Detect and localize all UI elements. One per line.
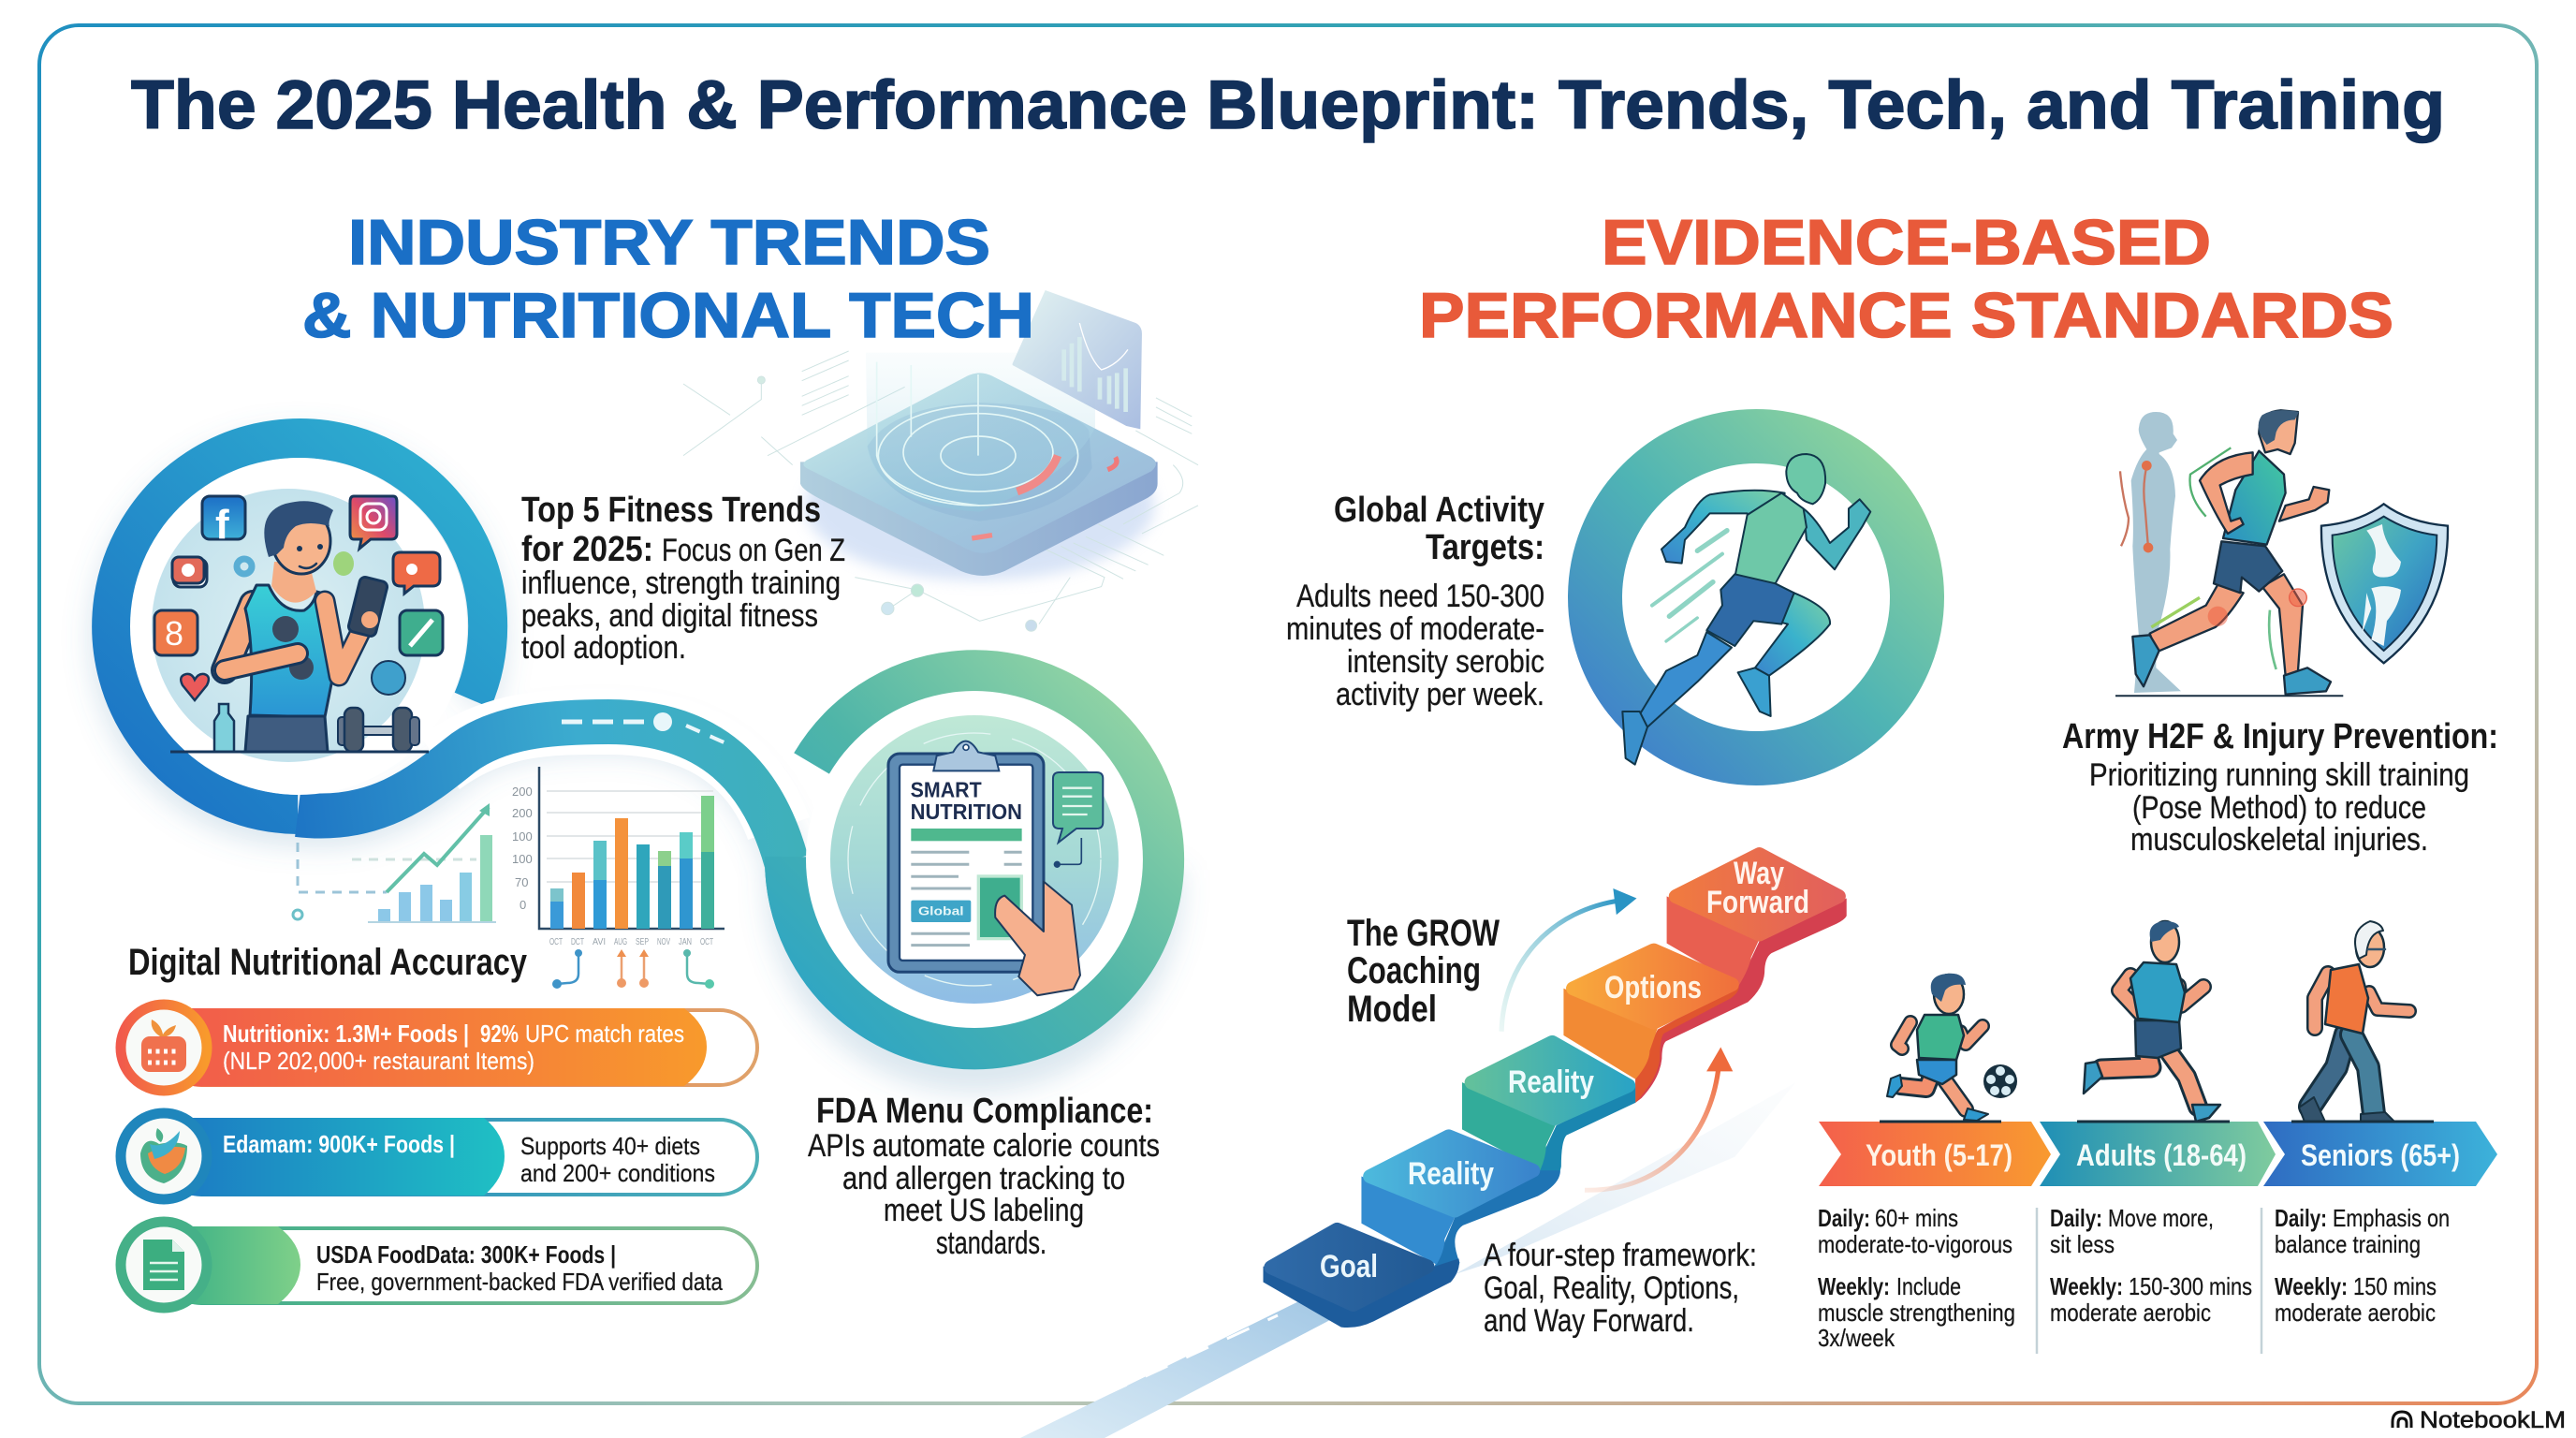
chart: multi colour bar chart: 200 — [512, 806, 533, 820]
step: goal — [1263, 1229, 1459, 1328]
step: reality lower — [1361, 1137, 1560, 1290]
hand — [995, 882, 1080, 995]
heading: industry trends — [302, 207, 1034, 351]
text: the grow coaching model: Coaching — [1347, 950, 1481, 991]
neck and head — [271, 562, 316, 603]
figure: senior walker — [2299, 921, 2409, 1122]
chat bubble — [1053, 772, 1103, 868]
heading: evidence-based performance standards: EVIDENCE-BASED — [1602, 207, 2211, 278]
chevron: youth — [1819, 1122, 2051, 1186]
winding road — [298, 722, 786, 861]
text: youth guidelines: Daily: — [1818, 1204, 1870, 1232]
text: youth guidelines: Include — [1896, 1272, 1961, 1300]
pill: edamam: Edamam: 900K+ Foods | — [223, 1130, 455, 1158]
text: senior guidelines — [2275, 1204, 2450, 1327]
step: way forward — [1635, 855, 1847, 1103]
heading: evidence-based performance standards — [1419, 207, 2393, 351]
text: the grow coaching model: Model — [1347, 989, 1437, 1030]
text: four-step framework: Goal, Reality, Options, — [1484, 1270, 1739, 1306]
labels on steps: Reality — [1508, 1064, 1594, 1100]
text: adult guidelines: Move more, — [2108, 1204, 2214, 1232]
text: youth guidelines: 3x/week — [1818, 1324, 1895, 1352]
arrow: blue curve — [1501, 888, 1636, 1032]
illustration: smart nutrition clipboard — [806, 691, 1143, 1028]
soccer ball — [1983, 1064, 2017, 1098]
tank top — [245, 585, 337, 717]
chart: multi colour bar chart: 100 — [512, 852, 533, 866]
text: adult guidelines: sit less — [2050, 1230, 2115, 1258]
chart: multi colour bar chart: 70 — [515, 875, 528, 889]
chevron: youth: Youth (5-17) — [1866, 1138, 2012, 1172]
text: army h2f and injury prevention: musculoskeletal injuries. — [2130, 822, 2428, 858]
chart: multi colour bar chart: AUG — [614, 937, 627, 947]
labels on steps — [1320, 856, 1809, 1284]
ground line — [170, 751, 429, 753]
clipboard: Global — [918, 903, 964, 917]
text: adult guidelines: 150-300 mins — [2129, 1272, 2252, 1300]
heading: industry trends: INDUSTRY TRENDS — [348, 207, 990, 278]
text: global activity targets — [1286, 491, 1544, 712]
chevron: adults — [2040, 1122, 2276, 1186]
social icon: gear — [237, 559, 252, 574]
chart: multi colour bar chart — [512, 767, 724, 989]
runner — [1622, 454, 1870, 765]
platform top — [803, 373, 1156, 553]
text: youth guidelines: 60+ mins — [1875, 1204, 1958, 1232]
text: adult guidelines: moderate aerobic — [2050, 1299, 2211, 1327]
chart: multi colour bar chart: 200 — [512, 785, 533, 799]
chevron: seniors: Seniors (65+) — [2301, 1138, 2460, 1172]
text: global activity targets: Targets: — [1426, 528, 1544, 567]
chart: multi colour bar chart: OCT — [549, 937, 563, 947]
illustration: holographic tech platform — [683, 290, 1198, 631]
text: the grow coaching model: The GROW — [1347, 913, 1500, 954]
social icon: instagram — [350, 496, 397, 549]
social icon: orange bubble — [393, 552, 440, 594]
text: top 5 fitness trends: tool adoption. — [521, 630, 686, 666]
recessed track — [868, 403, 1092, 521]
text: fda menu compliance: meet US labeling — [884, 1193, 1084, 1228]
pill: nutritionix: 92% — [480, 1020, 519, 1048]
road under steps — [1020, 1292, 1348, 1438]
dashboard panel — [1013, 290, 1142, 429]
labels on steps: Way — [1734, 856, 1784, 891]
text: senior guidelines: Emphasis on — [2333, 1204, 2450, 1232]
labels on steps: Forward — [1706, 885, 1809, 920]
text: senior guidelines: balance training — [2275, 1230, 2421, 1258]
motion arrows — [2190, 448, 2231, 517]
clipboard: SMART — [911, 778, 982, 802]
circuit lines — [683, 351, 1198, 631]
pill: usda fooddata — [121, 1222, 757, 1308]
text: fda menu compliance: FDA Menu Compliance: — [816, 1092, 1153, 1131]
pill: usda fooddata: USDA FoodData: 300K+ Foods | — [316, 1240, 616, 1269]
pill: nutritionix: Nutritionix: 1.3M+ Foods | — [223, 1020, 469, 1048]
illustration: fitness influencer circle — [130, 458, 467, 795]
back arm — [225, 604, 253, 670]
clipboard: NUTRITION — [911, 800, 1022, 824]
pill: edamam — [121, 1113, 757, 1199]
pill: edamam: and 200+ conditions — [520, 1159, 715, 1187]
person — [225, 501, 388, 752]
text: army h2f and injury prevention: Prioritizing running skill training — [2089, 757, 2469, 793]
text: senior guidelines: Weekly: — [2275, 1272, 2348, 1300]
standing silhouette — [2131, 412, 2181, 693]
running man — [2132, 410, 2331, 695]
front arm — [325, 601, 365, 676]
text: army h2f and injury prevention: (Pose Method) to reduce — [2132, 790, 2426, 826]
text: youth guidelines: moderate-to-vigorous — [1818, 1230, 2012, 1258]
social icon: green orb — [333, 551, 354, 576]
chart: multi colour bar chart: 100 — [512, 829, 533, 844]
icon: notebooklm mark — [2393, 1412, 2411, 1428]
text: youth guidelines: Weekly: — [1818, 1272, 1890, 1300]
social icon: link: 8 — [165, 614, 183, 653]
text: global activity targets: activity per week. — [1336, 677, 1544, 712]
pill: nutritionix — [121, 1005, 757, 1091]
text: fda menu compliance: and allergen tracking to — [842, 1161, 1125, 1196]
text: army h2f and injury prevention: Army H2F & Injury Prevention: — [2062, 717, 2498, 756]
icon: food calculator — [141, 1020, 186, 1072]
injury highlights — [2208, 607, 2228, 626]
text: senior guidelines: 150 mins — [2353, 1272, 2437, 1300]
illustration: runner in gradient ring — [1595, 436, 1917, 765]
text: global activity targets: intensity serobic — [1347, 644, 1544, 680]
icon: swirl bowl — [140, 1128, 187, 1183]
text: top 5 fitness trends: for 2025: — [521, 530, 653, 569]
left ring — [111, 438, 488, 814]
social icon: heart — [181, 674, 209, 700]
text: adult guidelines — [2050, 1204, 2252, 1327]
text: adult guidelines: Weekly: — [2050, 1272, 2123, 1300]
social icon: facebook — [202, 496, 245, 548]
text: top 5 fitness trends: Top 5 Fitness Trends — [521, 491, 821, 530]
social icon: facebook: f — [215, 502, 229, 548]
ground line — [2115, 693, 2343, 698]
chart: multi colour bar chart: JAN — [679, 937, 692, 947]
icon: document — [143, 1240, 184, 1290]
text: four-step framework: A four-step framework: — [1484, 1238, 1757, 1273]
shield with knee — [2321, 504, 2448, 663]
chevron: seniors — [2263, 1122, 2497, 1186]
text: four-step framework: and Way Forward. — [1484, 1303, 1694, 1339]
chart connectors — [552, 949, 714, 989]
hologram column — [866, 353, 1095, 512]
water bottle — [214, 704, 234, 752]
heading: digital nutritional accuracy: Digital Nutritional Accuracy — [128, 942, 528, 983]
heading: evidence-based performance standards: PERFORMANCE STANDARDS — [1419, 280, 2393, 351]
text: global activity targets: Adults need 150-300 — [1296, 579, 1544, 614]
chart: small rising bars — [293, 803, 496, 922]
labels on steps: Reality — [1408, 1156, 1494, 1192]
figure: youth with ball — [1887, 974, 2017, 1121]
clipboard — [888, 741, 1044, 972]
connected rings and road — [110, 438, 1163, 1072]
text: senior guidelines: moderate aerobic — [2275, 1299, 2436, 1327]
concentric rings — [877, 362, 1117, 538]
text: fda menu compliance — [808, 1092, 1160, 1261]
platform glow — [805, 431, 1154, 580]
arrow: orange curve — [1585, 1047, 1733, 1190]
figure: adult runner — [2084, 921, 2220, 1122]
right ring — [786, 671, 1163, 1048]
text: top 5 fitness trends — [521, 491, 845, 666]
chart: multi colour bar chart: 0 — [520, 898, 526, 912]
illustration: posture and running form — [2115, 410, 2448, 696]
pill: edamam: Supports 40+ diets — [520, 1132, 700, 1160]
hair — [264, 501, 333, 557]
step: reality upper — [1462, 1042, 1635, 1196]
illustration: grow coaching staircase — [1263, 855, 1847, 1328]
chart: multi colour bar chart: AVI — [593, 937, 606, 947]
social icon: link — [154, 610, 198, 655]
text: youth guidelines — [1818, 1204, 2015, 1352]
dumbbell in hand — [272, 616, 299, 642]
social icon: blue badge — [372, 661, 405, 695]
labels on steps: Goal — [1320, 1249, 1378, 1284]
chart: multi colour bar chart: DCT — [571, 937, 584, 947]
text: fda menu compliance: APIs automate calorie counts — [808, 1128, 1160, 1164]
text: top 5 fitness trends: influence, strength training — [521, 565, 841, 601]
shorts — [245, 716, 328, 752]
social icon: chat — [172, 557, 207, 587]
chart: multi colour bar chart: SEP — [636, 937, 649, 947]
pill: usda fooddata: Free, government-backed FDA verified data — [316, 1268, 723, 1296]
heading: industry trends: & NUTRITIONAL TECH — [302, 280, 1034, 351]
notebooklm watermark: NotebookLM — [2420, 1407, 2566, 1433]
phone — [347, 576, 388, 638]
platform base — [800, 462, 1158, 576]
text: adult guidelines: Daily: — [2050, 1204, 2102, 1232]
text: fda menu compliance: standards. — [936, 1225, 1046, 1261]
ground lines under figures — [1880, 1120, 2434, 1123]
pill: nutritionix: (NLP 202,000+ restaurant Items) — [223, 1047, 534, 1075]
text: four-step framework — [1484, 1238, 1757, 1339]
labels on steps: Options — [1604, 970, 1702, 1005]
step: options — [1563, 950, 1739, 1103]
chart: multi colour bar chart: OCT — [700, 937, 713, 947]
pill: nutritionix: UPC match rates — [525, 1020, 684, 1048]
text: senior guidelines: Daily: — [2275, 1204, 2327, 1232]
floor dumbbell — [338, 708, 419, 752]
text: global activity targets: minutes of moderate- — [1286, 611, 1544, 647]
title: The 2025 Health & Performance Blueprint: Trends, Tech, and Training — [131, 67, 2445, 143]
text: the grow coaching model — [1347, 913, 1500, 1030]
social icon: green — [400, 610, 443, 655]
text: top 5 fitness trends: peaks, and digital fitness — [521, 598, 818, 634]
text: army h2f and injury prevention — [2062, 717, 2498, 858]
text: global activity targets: Global Activity — [1334, 491, 1544, 530]
text: youth guidelines: muscle strengthening — [1818, 1299, 2015, 1327]
activity ring — [1595, 436, 1917, 758]
text: top 5 fitness trends: Focus on Gen Z — [662, 533, 845, 568]
chevron: adults: Adults (18-64) — [2076, 1138, 2247, 1172]
chart: multi colour bar chart: NOV — [657, 937, 670, 947]
